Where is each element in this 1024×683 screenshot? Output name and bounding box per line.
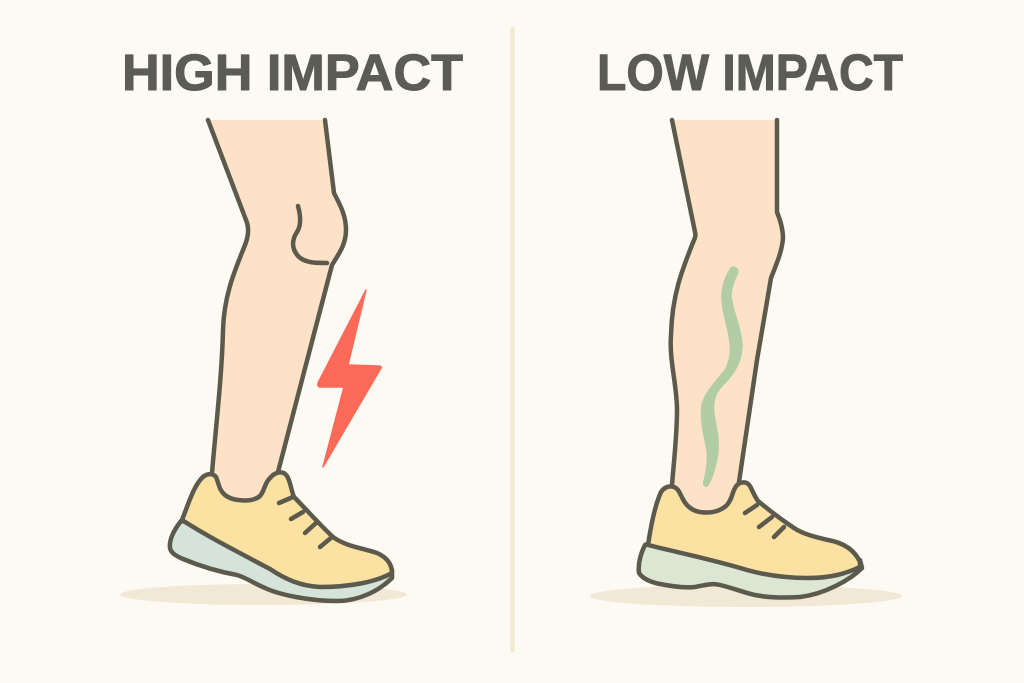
ground shadow: low impact <box>590 585 902 607</box>
icon: red lightning bolt <box>318 290 381 467</box>
shoe sole <box>639 544 862 598</box>
knee cap line <box>293 206 327 263</box>
ground shadow: high impact <box>120 584 407 605</box>
panel: high impact <box>120 44 463 605</box>
leg with bent knee <box>208 120 346 500</box>
green vein <box>701 267 742 486</box>
shoe laces <box>745 505 784 537</box>
walking shoe, flat <box>639 482 862 598</box>
straight leg <box>670 120 783 515</box>
panel: low impact <box>590 44 903 607</box>
heading: low impact: LOW IMPACT <box>597 44 903 101</box>
shoe laces <box>279 497 332 547</box>
shoe upper <box>648 482 860 578</box>
shoe upper <box>182 472 392 587</box>
running shoe, heel raised <box>170 472 392 601</box>
heading: high impact: HIGH IMPACT <box>122 44 463 101</box>
shoe sole <box>170 521 392 601</box>
